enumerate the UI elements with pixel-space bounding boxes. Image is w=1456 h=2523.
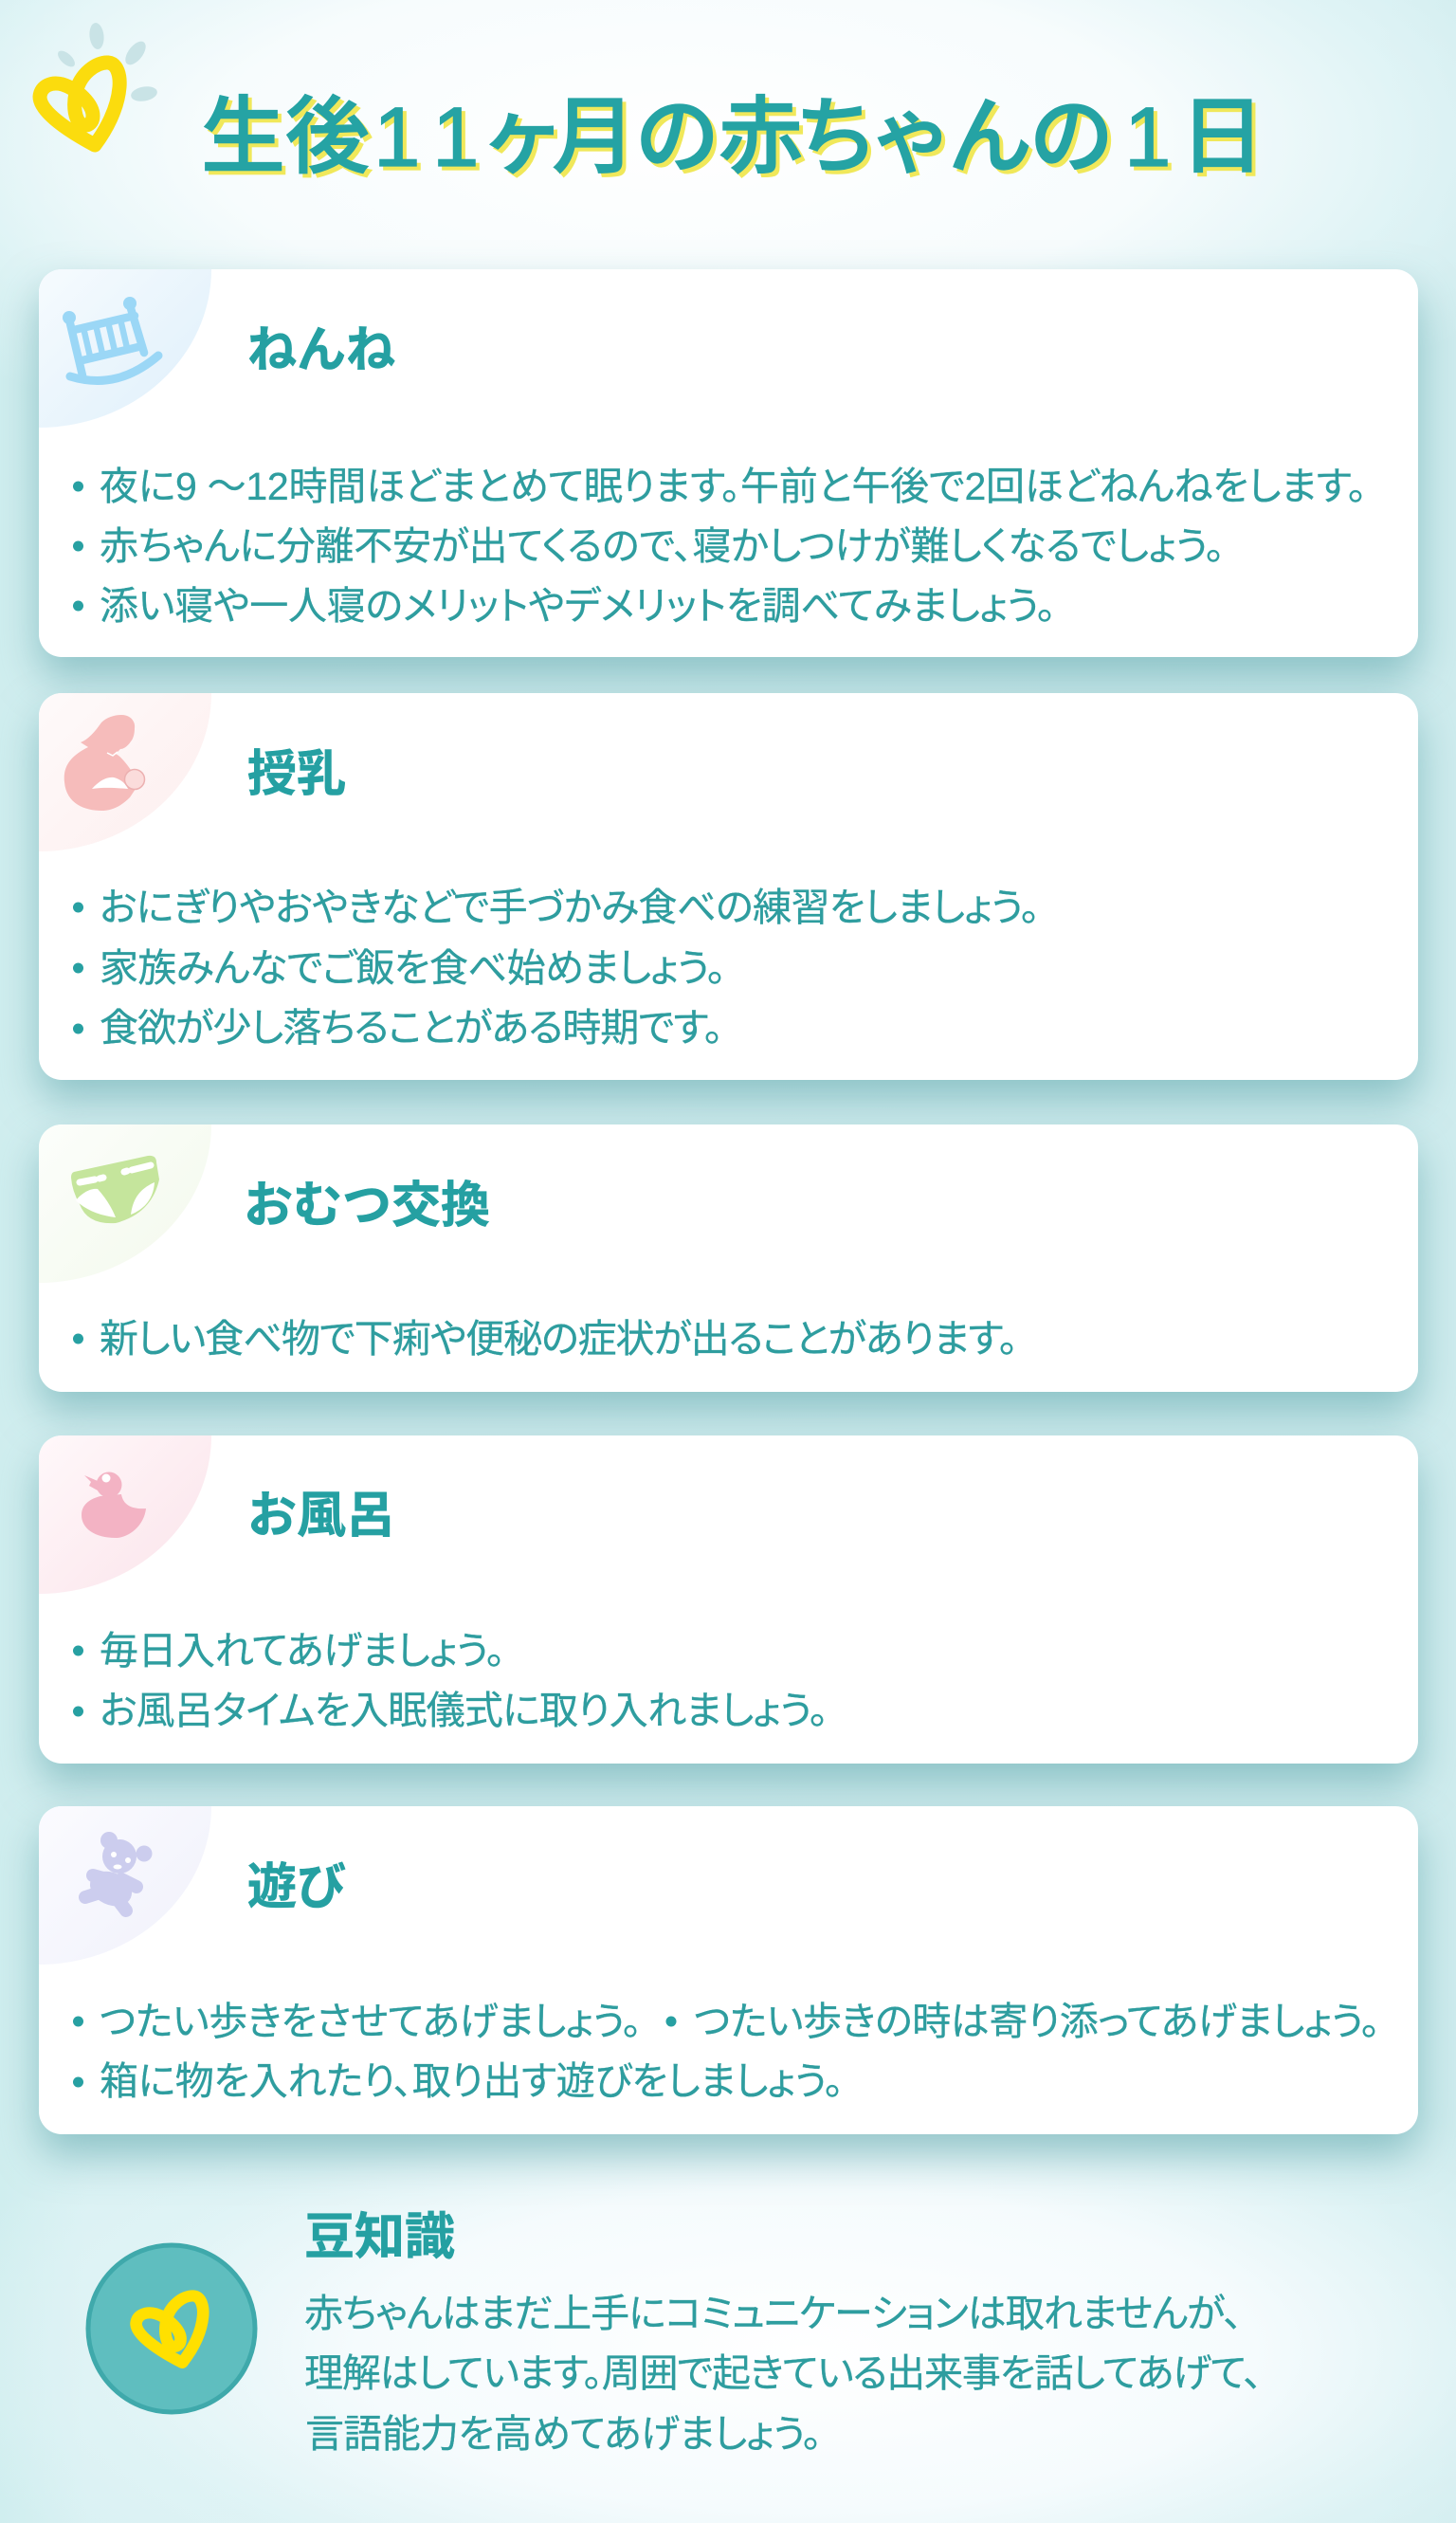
panel: 授乳 xyxy=(39,693,1418,1080)
list xyxy=(73,886,1040,1050)
title: 生後11ヶ月の赤ちゃんの1日 xyxy=(201,89,1265,184)
heading: 授乳 xyxy=(247,747,346,802)
heading: お風呂 xyxy=(247,1489,395,1544)
list: 食欲が少し落ちることがある時期です。 xyxy=(100,1006,723,1050)
logo: yellow heart with rays xyxy=(32,23,157,152)
text block: trivia: 赤ちゃんはまだ上手にコミュニケーションは取れませんが、 xyxy=(304,2292,1243,2335)
icon: breastfeeding mother xyxy=(64,715,146,811)
icon background: pink corner xyxy=(39,693,211,851)
heading: おむつ交換 xyxy=(244,1179,490,1234)
title: 生後11ヶ月の赤ちゃんの1日 xyxy=(205,93,1268,188)
panel: 遊び xyxy=(39,1806,1418,2134)
list: つたい歩きをさせてあげましょう。 xyxy=(100,2000,642,2043)
heading: 豆知識: 豆知識 xyxy=(304,2209,455,2265)
list: 夜に9 ～12時間ほどまとめて眠ります。午前と午後で2回ほどねんねをします。 xyxy=(100,465,1367,508)
list: 箱に物を入れたり、取り出す遊びをしましょう。 xyxy=(100,2059,844,2103)
list: 添い寝や一人寝のメリットやデメリットを調べてみましょう。 xyxy=(100,584,1056,628)
panel: おむつ交換 xyxy=(39,1124,1418,1392)
list xyxy=(73,2000,1380,2103)
panel: お風呂 xyxy=(39,1435,1418,1764)
icon background: green corner xyxy=(39,1124,211,1283)
heading: ねんね xyxy=(247,323,395,378)
list: おにぎりやおやきなどで手づかみ食べの練習をしましょう。 xyxy=(100,886,1040,929)
text block: trivia: 理解はしています。周囲で起きている出来事を話してあげて、 xyxy=(304,2351,1263,2395)
heading: 遊び xyxy=(247,1860,346,1915)
list: 毎日入れてあげましょう。 xyxy=(100,1629,505,1673)
icon background: lavender corner xyxy=(39,1806,211,1965)
list xyxy=(73,1629,828,1732)
icon background: blue corner xyxy=(39,269,211,428)
list: お風呂タイムを入眠儀式に取り入れましょう。 xyxy=(100,1689,828,1732)
icon: rubber duck xyxy=(82,1472,146,1538)
list: 家族みんなでご飯を食べ始めましょう。 xyxy=(100,946,726,990)
icon: diaper xyxy=(71,1155,159,1223)
text block: trivia xyxy=(304,2292,1263,2456)
panel: ねんね xyxy=(39,269,1418,657)
list: 新しい食べ物で下痢や便秘の症状が出ることがあります。 xyxy=(100,1317,1018,1361)
list: 赤ちゃんに分離不安が出てくるので、寝かしつけが難しくなるでしょう。 xyxy=(100,524,1225,568)
icon background: rose corner xyxy=(39,1435,211,1594)
text block: trivia: 言語能力を高めてあげましょう。 xyxy=(305,2412,822,2456)
icon: teal circle with heart xyxy=(85,2243,258,2414)
icon: teddy bear xyxy=(79,1832,152,1917)
list xyxy=(73,465,1367,628)
list: つたい歩きの時は寄り添ってあげましょう。 xyxy=(694,2000,1380,2043)
icon: crib xyxy=(63,297,163,385)
